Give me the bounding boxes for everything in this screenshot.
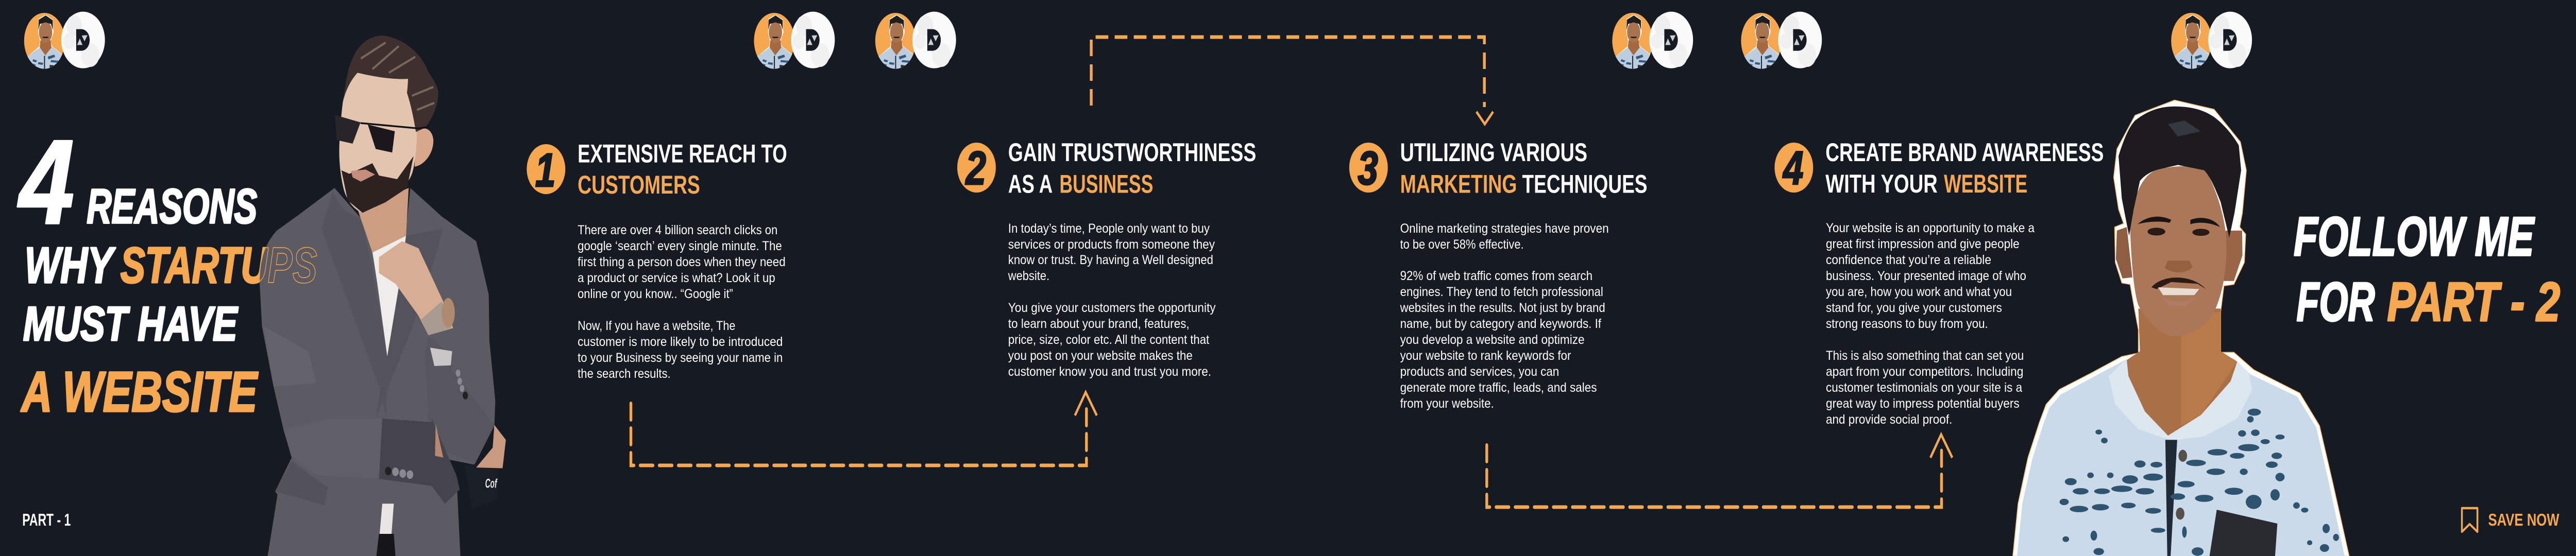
label: part 1: PART - 1: [22, 511, 71, 530]
body text 2: know or trust. By having a Well designed: [1008, 253, 1213, 267]
body text 2: to learn about your brand, features,: [1008, 317, 1190, 331]
body text 1: [578, 223, 786, 381]
logo badge 6: [2171, 12, 2252, 71]
logo badge 5: [1741, 12, 1822, 71]
heading 3: [1400, 138, 1648, 199]
photo: smiling young man with white outline: [2013, 100, 2349, 556]
eyebrows: [2138, 217, 2171, 224]
nose shadow: [2165, 260, 2193, 272]
heading 4: [1825, 138, 2104, 198]
body text 3: name, but by category and keywords. If: [1400, 317, 1602, 331]
body text 4: business. Your presented image of who: [1826, 269, 2026, 283]
neck: [358, 188, 409, 253]
heading 2: BUSINESS: [1059, 170, 1153, 199]
placket: [2165, 440, 2177, 556]
title: 4 reasons why startups must have a website: MUST HAVE: [23, 297, 239, 351]
sunglasses: [335, 115, 361, 144]
heading 1: CUSTOMERS: [578, 171, 700, 199]
heading 3: UTILIZING VARIOUS: [1400, 138, 1587, 167]
photo: man in grey suit: [260, 36, 506, 556]
number badge 3: 3: [1358, 142, 1378, 195]
mustache: [2151, 277, 2206, 289]
title: 4 reasons why startups must have a website: [17, 116, 317, 424]
heading 4: WEBSITE: [1944, 170, 2027, 198]
arrow: step 1 to step 2: [631, 392, 1097, 465]
logo badge 2: [754, 12, 835, 71]
body text 1: online or you know.. “Google it”: [578, 287, 733, 301]
body text 1: the search results.: [578, 367, 671, 381]
eyes: [2147, 228, 2165, 235]
number badge 4: [1774, 142, 1813, 195]
body text 1: first thing a person does when they need: [578, 255, 786, 269]
body text 2: website.: [1008, 269, 1049, 283]
number badge 4: 4: [1782, 142, 1803, 195]
step 4: create brand awareness with your website: [1774, 138, 2104, 427]
number badge 3: [1349, 142, 1388, 195]
photo: man in grey suit: Cof: [485, 477, 498, 491]
heading 1: EXTENSIVE REACH TO: [578, 140, 787, 168]
step 1: extensive reach to customers: [527, 140, 787, 381]
body text 3: engines. They tend to fetch professional: [1400, 285, 1603, 299]
body text 3: generate more traffic, leads, and sales: [1400, 380, 1597, 395]
heading 3: MARKETING: [1400, 170, 1517, 199]
ear: [415, 128, 433, 167]
face: [2130, 166, 2226, 336]
body text 4: strong reasons to buy from you.: [1826, 317, 1988, 331]
body text 1: to your Business by seeing your name in: [578, 351, 783, 365]
body text 4: great way to impress potential buyers: [1826, 396, 2020, 411]
label: save now: SAVE NOW: [2488, 511, 2560, 530]
arrow: step 3 to step 4: [1487, 435, 1952, 507]
body text 3: you develop a website and optimize: [1400, 333, 1585, 347]
body text 3: from your website.: [1400, 396, 1494, 411]
body text 4: and provide social proof.: [1826, 412, 1952, 427]
mouth: [2158, 287, 2199, 295]
body text 4: great first impression and give people: [1826, 237, 2020, 251]
body text 1: There are over 4 billion search clicks on: [578, 223, 777, 237]
heading 2: [1008, 138, 1256, 199]
body text 1: Now, If you have a website, The: [578, 319, 735, 333]
logo badge 3: [875, 12, 956, 71]
closing message: follow me for part 2: PART - 2: [2387, 271, 2560, 333]
logo badge 1: [24, 12, 105, 71]
closing message: follow me for part 2: FOLLOW ME: [2294, 206, 2535, 268]
body text 2: you post on your website makes the: [1008, 349, 1193, 363]
ears: [2116, 227, 2132, 279]
body text 2: In today’s time, People only want to buy: [1008, 221, 1210, 236]
white cutout outline: [2013, 100, 2349, 556]
t-shirt: [2017, 358, 2345, 556]
hair: [2119, 107, 2241, 238]
coffee cup: [465, 461, 498, 509]
title: 4 reasons why startups must have a website: WHY: [25, 237, 116, 293]
body text 3: 92% of web traffic comes from search: [1400, 269, 1592, 283]
body text 1: a product or service is what? Look it up: [578, 271, 775, 285]
beard: [342, 156, 414, 213]
arrow: step 2 to step 3: [1091, 37, 1493, 124]
body text 2: price, size, color etc. All the content that: [1008, 333, 1210, 347]
body text 4: Your website is an opportunity to make a: [1826, 221, 2035, 235]
body text 3: Online marketing strategies have proven: [1400, 221, 1609, 236]
body text 4: you are, how you work and what you: [1826, 285, 2012, 299]
face: [339, 73, 417, 213]
title: 4 reasons why startups must have a website: A WEBSITE: [20, 360, 258, 424]
title: 4 reasons why startups must have a website: 4: [17, 116, 74, 249]
heading 1: [578, 140, 787, 199]
step 2: gain trustworthiness as a business: [957, 138, 1256, 379]
body text 3: [1400, 221, 1609, 411]
body text 2: services or products from someone they: [1008, 237, 1215, 252]
neck: [2127, 308, 2237, 436]
title: 4 reasons why startups must have a website: STARTUPS: [121, 237, 317, 293]
body text 3: to be over 58% effective.: [1400, 237, 1524, 252]
step 3: utilizing various marketing techniques: [1349, 138, 1648, 411]
body text 4: confidence that you’re a reliable: [1826, 253, 1991, 267]
body text 3: websites in the results. Not just by brand: [1400, 301, 1605, 315]
closing message: follow me for part 2: [2294, 206, 2560, 333]
title: 4 reasons why startups must have a website: REASONS: [87, 179, 257, 233]
icon: bookmark: [2462, 508, 2478, 532]
body text 4: [1826, 221, 2035, 427]
body text 1: customer is more likely to be introduced: [578, 335, 783, 349]
number badge 2: [957, 142, 996, 195]
logo badge 4: [1612, 12, 1693, 71]
body text 2: [1008, 221, 1216, 379]
number badge 1: [527, 144, 565, 197]
lower hand: [476, 425, 506, 468]
body text 4: This is also something that can set you: [1826, 349, 2024, 363]
heading 3: TECHNIQUES: [1522, 170, 1648, 199]
body text 2: You give your customers the opportunity: [1008, 301, 1216, 315]
hand and watch: [379, 241, 453, 335]
hair: [343, 36, 438, 132]
suit: [260, 188, 495, 556]
body text 4: apart from your competitors. Including: [1826, 364, 2023, 379]
heading 4: CREATE BRAND AWARENESS: [1825, 138, 2104, 167]
closing message: follow me for part 2: FOR: [2297, 271, 2375, 333]
heading 2: AS A: [1008, 170, 1053, 199]
body text 2: customer know you and trust you more.: [1008, 364, 1211, 379]
body text 1: google ‘search’ every single minute. The: [578, 239, 782, 253]
title outline overlay: startups: STARTUPS: [121, 237, 317, 293]
pocket: [2210, 510, 2277, 556]
body text 3: products and services, you can: [1400, 364, 1559, 379]
heading 2: GAIN TRUSTWORTHINESS: [1008, 138, 1256, 167]
print pattern: [2060, 409, 2339, 556]
sleeve buttons: [385, 370, 468, 479]
body text 4: stand for, you give your customers: [1826, 301, 2002, 315]
body text 4: customer testimonials on your site is a: [1826, 380, 2023, 395]
number badge 1: 1: [535, 144, 555, 197]
heading 4: WITH YOUR: [1825, 170, 1938, 198]
t-shirt: [372, 236, 406, 356]
body text 3: your website to rank keywords for: [1400, 349, 1571, 363]
number badge 2: 2: [965, 142, 986, 195]
